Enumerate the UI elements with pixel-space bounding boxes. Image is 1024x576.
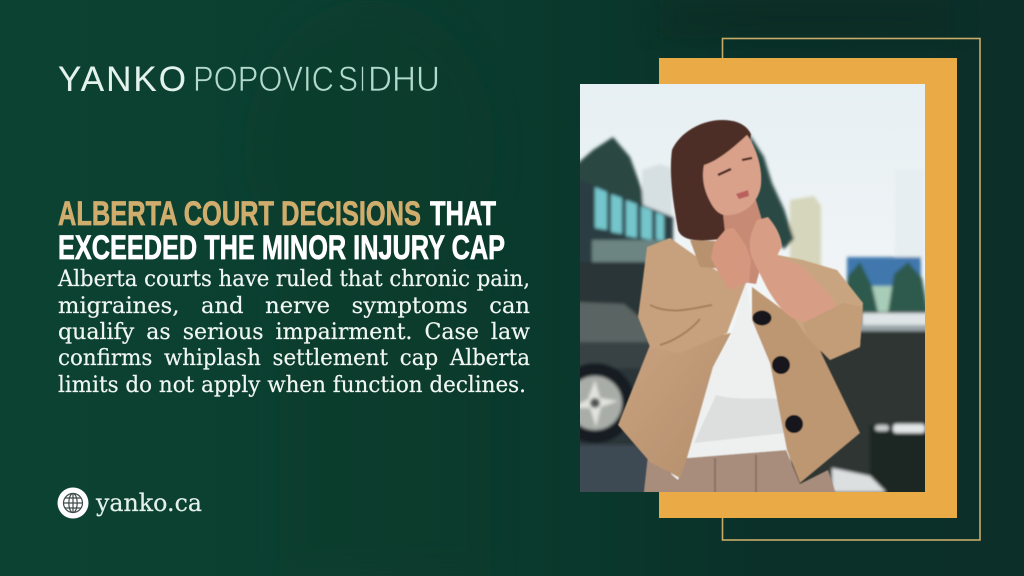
body text: confirms whiplash settlement cap Alberta	[58, 346, 530, 371]
jacket buttons	[752, 310, 772, 326]
website link	[58, 488, 202, 518]
icon: globe	[58, 488, 88, 518]
left sleeve	[638, 238, 747, 353]
heading: THAT	[430, 195, 496, 233]
logo wordmark: DHU	[368, 60, 440, 99]
right forearm	[750, 217, 837, 322]
jacket right panel	[752, 287, 860, 483]
blue building and distant trees	[847, 257, 921, 289]
body text: limits do not apply when function declines.	[58, 373, 526, 398]
neck	[722, 200, 762, 284]
body text: migraines, and nerve symptoms can	[58, 294, 530, 319]
body text	[57, 267, 530, 398]
frame: gold panel	[659, 58, 957, 518]
jacket left panel	[618, 333, 731, 478]
logo wordmark	[58, 60, 440, 99]
heading	[58, 195, 505, 267]
trees	[580, 135, 645, 207]
background buildings	[642, 164, 672, 218]
jacket cuff	[803, 303, 863, 360]
logo wordmark: I	[360, 60, 365, 99]
face	[703, 135, 761, 215]
hair	[671, 120, 751, 241]
street and cars	[570, 262, 670, 502]
frame: gold outline	[722, 38, 980, 540]
car wheel	[580, 362, 632, 444]
website url: yanko.ca	[95, 489, 202, 517]
body text: qualify as serious impairment. Case law	[58, 320, 530, 345]
body text: Alberta courts have ruled that chronic pain,	[57, 267, 530, 292]
photo: woman holding her neck	[580, 84, 925, 492]
logo wordmark: S	[338, 60, 358, 99]
logo wordmark: POPOVIC	[193, 60, 334, 99]
glass building	[580, 182, 676, 265]
trousers	[643, 450, 836, 492]
right sleeve	[773, 254, 863, 360]
heading: ALBERTA COURT DECISIONS	[58, 195, 421, 233]
left hand	[711, 228, 751, 290]
shirt	[686, 316, 787, 458]
logo wordmark: YANKO	[58, 60, 186, 99]
eyes and lips	[718, 158, 752, 175]
heading: EXCEEDED THE MINOR INJURY CAP	[58, 229, 505, 267]
